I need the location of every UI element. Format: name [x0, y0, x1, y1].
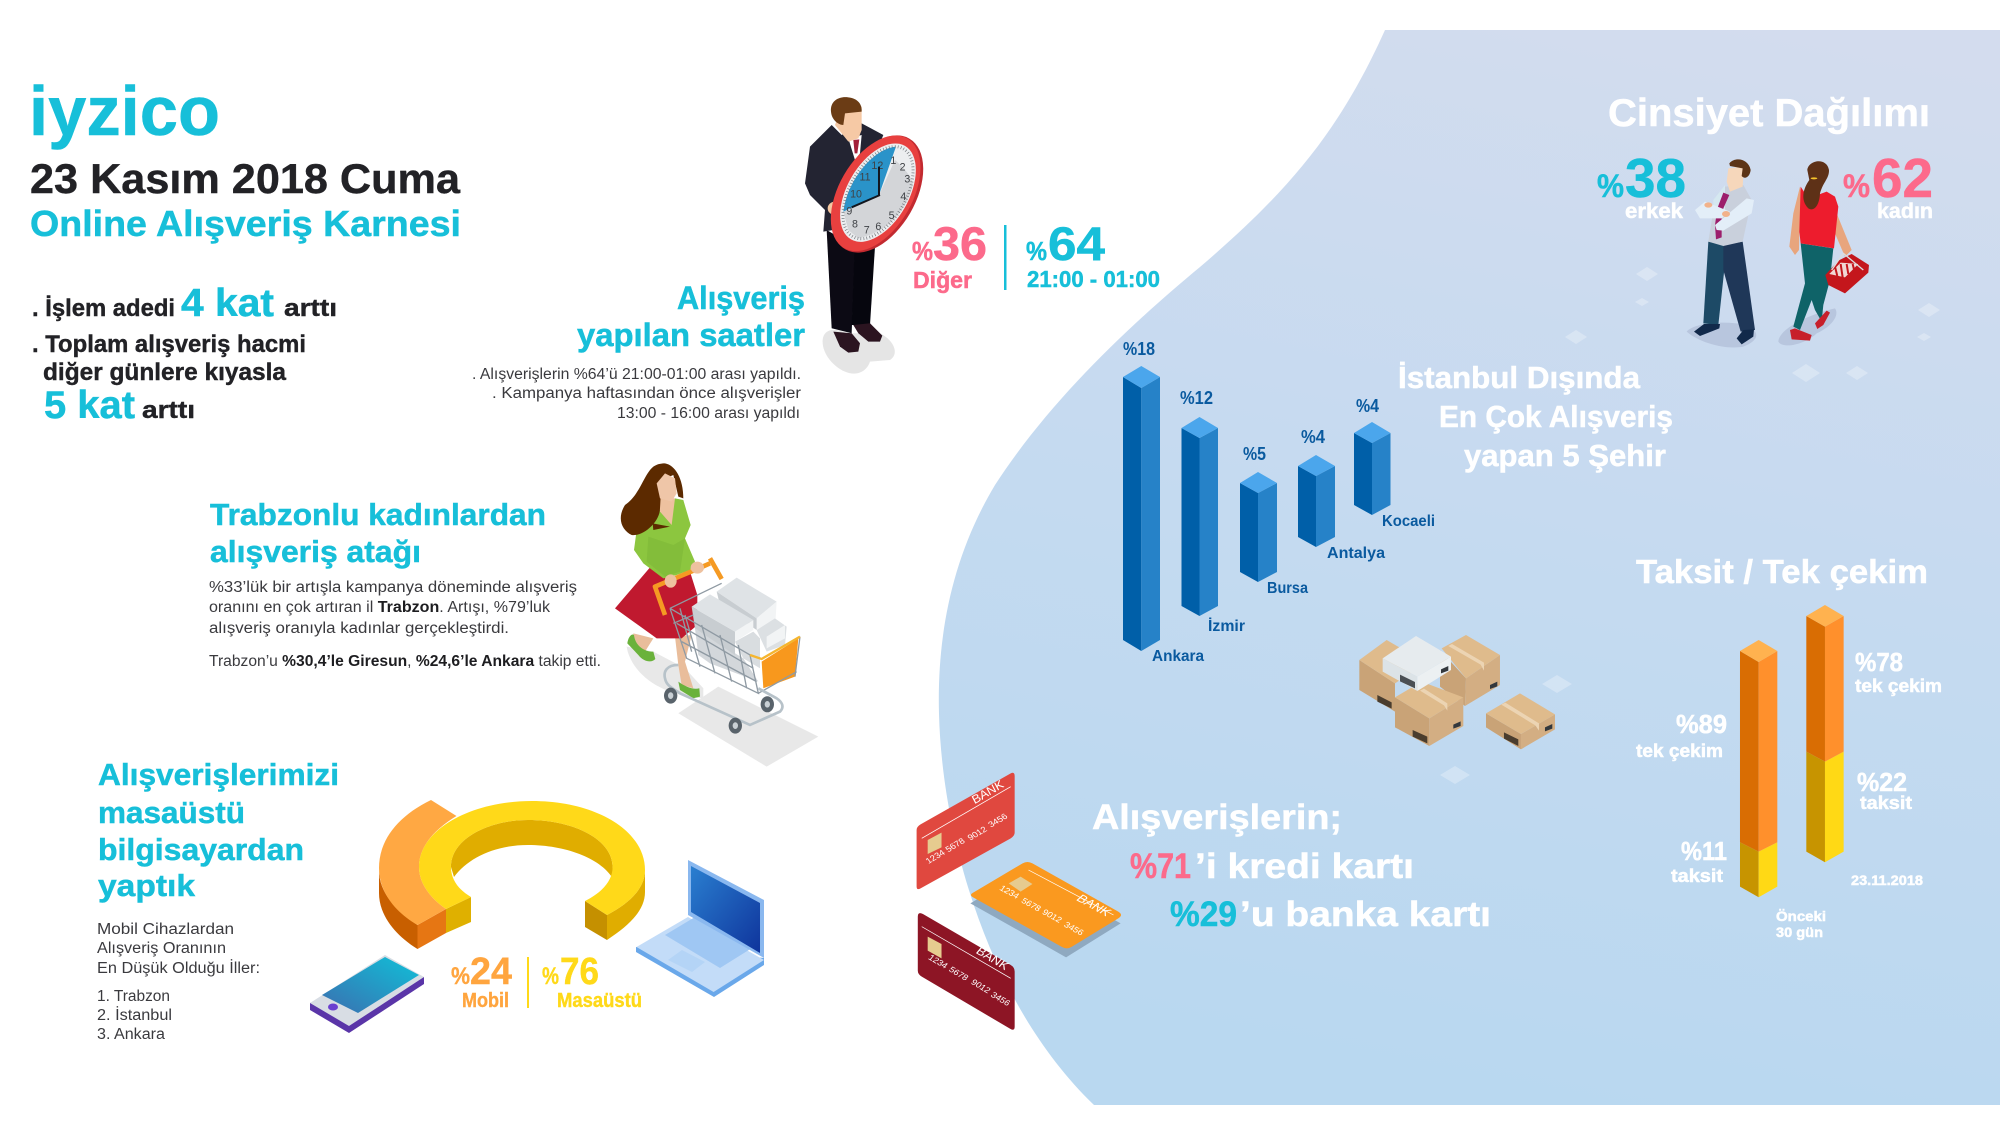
- decorative floor diamonds: [1440, 267, 1940, 784]
- heading: shopping hours: Alışveriş: [677, 280, 805, 316]
- clock: 12: [871, 160, 883, 172]
- heading: desktop shopping: Alışverişlerimizi: [98, 757, 339, 792]
- card: maroon: 5678: [947, 965, 971, 982]
- bar: İzmir: İzmir: [1208, 617, 1245, 635]
- stat: 24 percent mobile: %: [451, 963, 470, 990]
- stat labels: installment chart: 23.11.2018: [1851, 872, 1923, 888]
- stat: 38 percent men: %: [1597, 168, 1624, 204]
- subtitle: Online Alışveriş Karnesi: [30, 203, 461, 244]
- card: red: BANK: [968, 778, 1008, 806]
- text block: key highlights: arttı: [142, 397, 195, 424]
- divider: [1004, 225, 1006, 290]
- card: red: [917, 773, 1015, 889]
- card: maroon: 1234: [926, 953, 950, 970]
- bar: İzmir: %12: [1180, 388, 1213, 408]
- bar: Ankara: %18: [1123, 339, 1155, 359]
- stat labels: installment chart: %89: [1676, 709, 1727, 739]
- illustration: cardboard boxes: [1359, 635, 1555, 749]
- text block: key highlights: 4 kat: [181, 282, 274, 325]
- heading: desktop shopping: masaüstü: [98, 795, 245, 830]
- stat: 64 percent 21:00-01:00: %: [1026, 236, 1047, 266]
- illustration: woman with basket: [1778, 161, 1869, 345]
- stat labels: installment chart: tek çekim: [1855, 676, 1942, 696]
- clock: [812, 120, 942, 268]
- text block: key highlights: diğer günlere kıyasla: [43, 359, 287, 386]
- heading: shopping hours: [577, 280, 805, 353]
- stat: 24 percent mobile: 24: [470, 951, 512, 993]
- clock: 3: [904, 173, 910, 185]
- illustration: woman with shopping cart: [615, 463, 818, 767]
- chart: 3D donut mobile vs desktop: [379, 800, 645, 949]
- stat: 62 percent women: [1843, 147, 1933, 223]
- text block: card share: Alışverişlerin;: [1092, 798, 1342, 837]
- illustration: businessman holding clock: [805, 97, 942, 374]
- card: red: 3456: [986, 811, 1010, 829]
- text block: card share: [1092, 798, 1491, 934]
- bar: Ankara: [1123, 339, 1204, 665]
- text block: key highlights: arttı: [284, 295, 337, 322]
- text block: lowest mobile cities: 2. İstanbul: [97, 1006, 172, 1024]
- card: maroon: BANK: [973, 944, 1013, 973]
- stat: 76 percent desktop: Masaüstü: [557, 990, 642, 1012]
- clock: 11: [859, 172, 871, 184]
- heading: shopping hours: yapılan saatler: [577, 317, 805, 353]
- heading: Trabzon: Trabzonlu kadınlardan: [210, 497, 546, 532]
- clock: 9: [846, 206, 852, 218]
- stat labels: installment chart: 30 gün: [1776, 924, 1823, 940]
- icon: smartphone: [310, 955, 424, 1033]
- bar: 23.11.2018: [1806, 605, 1844, 862]
- card: orange: BANK: [1074, 892, 1114, 919]
- bar: Antalya: Antalya: [1327, 545, 1385, 562]
- clock: 4: [900, 191, 906, 203]
- stat: 62 percent women: kadın: [1877, 200, 1933, 223]
- stat: 64 percent 21:00-01:00: [1026, 217, 1160, 292]
- clock: 10: [850, 188, 862, 200]
- text block: lowest mobile cities: [97, 921, 260, 1043]
- bar: Bursa: %5: [1243, 444, 1266, 464]
- heading: desktop shopping: yaptık: [98, 868, 196, 903]
- card: maroon: [918, 913, 1015, 1030]
- card: maroon: 9012: [969, 977, 993, 995]
- bar: Antalya: %4: [1301, 427, 1325, 447]
- stat labels: installment chart: taksit: [1671, 866, 1723, 886]
- text block: key highlights: . Toplam alışveriş hacmi: [32, 331, 306, 358]
- bar chart: installment stacked bars: [1740, 605, 1844, 897]
- heading: desktop shopping: bilgisayardan: [98, 832, 304, 867]
- text block: card share: ’i kredi kartı: [1195, 847, 1414, 886]
- heading: Trabzon: alışveriş atağı: [210, 534, 421, 569]
- text block: card share: %71: [1130, 847, 1191, 886]
- heading: top 5 cities: En Çok Alışveriş: [1439, 399, 1673, 434]
- stat: 64 percent 21:00-01:00: 21:00 - 01:00: [1027, 266, 1160, 292]
- stat: 24 percent mobile: Mobil: [462, 990, 509, 1012]
- bar: Kocaeli: [1354, 396, 1435, 530]
- cart with boxes: [655, 558, 800, 734]
- card: orange: [970, 862, 1121, 957]
- stat: 36 percent other: %: [912, 236, 933, 266]
- stat labels: installment chart: tek çekim: [1636, 741, 1723, 761]
- illustration: bank cards: [917, 773, 1121, 1030]
- heading: Trabzon: [210, 497, 546, 569]
- clock: 8: [852, 218, 858, 230]
- text block: card share: ’u banka kartı: [1240, 895, 1491, 934]
- text block: card share: %29: [1170, 895, 1237, 934]
- clock: 7: [864, 224, 870, 236]
- stat: 76 percent desktop: %: [542, 963, 559, 990]
- heading: desktop shopping: [98, 757, 339, 903]
- stat: 64 percent 21:00-01:00: 64: [1048, 217, 1105, 270]
- bar chart: top 5 cities: [1123, 339, 1435, 665]
- text block: shopping hours notes: . Kampanya haftasından önce alışverişler: [492, 385, 801, 402]
- stat labels: installment chart: taksit: [1860, 793, 1912, 813]
- text block: Trabzon details: [209, 579, 601, 670]
- clock: 2: [900, 162, 906, 174]
- text block: Trabzon details: oranını en çok artıran il Trabzon. Artışı, %79’luk: [209, 599, 550, 616]
- stat: 62 percent women: %: [1843, 168, 1870, 204]
- text block: lowest mobile cities: Alışveriş Oranının: [97, 940, 226, 957]
- bar: previous 30 days: [1740, 640, 1777, 897]
- bar: Kocaeli: Kocaeli: [1382, 513, 1435, 530]
- text block: lowest mobile cities: Mobil Cihazlardan: [97, 921, 234, 938]
- stat labels: installment chart: Önceki: [1776, 908, 1826, 924]
- divider: [527, 957, 529, 1008]
- clock: 6: [875, 221, 881, 233]
- stat: 36 percent other: [912, 217, 987, 293]
- illustration: man: [1687, 159, 1756, 348]
- text block: shopping hours notes: [472, 366, 801, 422]
- bar: Antalya: [1298, 427, 1385, 562]
- card: red: 5678: [943, 836, 967, 854]
- bar: Bursa: [1240, 444, 1308, 597]
- heading: top 5 cities: [1398, 360, 1673, 473]
- icon: laptop: [636, 860, 764, 997]
- stat: 76 percent desktop: 76: [560, 951, 599, 993]
- text block: key highlights: [32, 282, 337, 427]
- stat: 38 percent men: [1597, 147, 1686, 223]
- card: orange: 9012: [1040, 907, 1064, 925]
- stat labels: installment chart: %78: [1855, 647, 1903, 677]
- text block: Trabzon details: %33’lük bir artışla kampanya döneminde alışveriş: [209, 579, 577, 596]
- clock: 1: [890, 155, 896, 167]
- text block: lowest mobile cities: 3. Ankara: [97, 1026, 165, 1043]
- stat: 76 percent desktop: [542, 951, 642, 1012]
- text block: Trabzon details: alışveriş oranıyla kadınlar gerçekleştirdi.: [209, 620, 509, 637]
- stat labels: installment chart: %11: [1681, 836, 1727, 866]
- heading: installment vs single payment: Taksit / Tek çekim: [1636, 553, 1928, 590]
- bar: İzmir: [1180, 388, 1245, 635]
- text block: Trabzon details: Trabzon’u %30,4’le Giresun, %24,6’le Ankara takip etti.: [209, 653, 601, 670]
- stat labels: installment chart: [1636, 647, 1942, 940]
- stat labels: installment chart: %22: [1857, 767, 1907, 797]
- text block: lowest mobile cities: En Düşük Olduğu İller:: [97, 959, 260, 977]
- card: orange: 5678: [1019, 896, 1043, 913]
- stat: 38 percent men: 38: [1625, 147, 1686, 209]
- card: red: 9012: [965, 824, 989, 842]
- stat: 62 percent women: 62: [1872, 147, 1933, 209]
- stat: 36 percent other: Diğer: [913, 267, 972, 293]
- heading: top 5 cities: yapan 5 Şehir: [1464, 438, 1666, 473]
- stat: 36 percent other: 36: [933, 217, 987, 270]
- clock: 5: [889, 210, 895, 222]
- text block: shopping hours notes: 13:00 - 16:00 arası yapıldı: [617, 405, 800, 422]
- bar: Bursa: Bursa: [1267, 580, 1308, 597]
- heading: top 5 cities: İstanbul Dışında: [1398, 360, 1641, 395]
- panel: blue curved background: [939, 30, 2000, 1105]
- text block: shopping hours notes: . Alışverişlerin %64’ü 21:00-01:00 arası yapıldı.: [472, 366, 801, 383]
- text block: key highlights: . İşlem adedi: [32, 295, 175, 322]
- stat: 38 percent men: erkek: [1625, 200, 1683, 223]
- card: red: 1234: [924, 848, 947, 865]
- logo: iyzico: iyzico: [29, 72, 220, 150]
- card: orange: 1234: [998, 883, 1021, 901]
- heading: gender distribution: Cinsiyet Dağılımı: [1608, 92, 1930, 135]
- card: orange: 3456: [1062, 920, 1086, 937]
- bar: Ankara: Ankara: [1152, 648, 1204, 665]
- title: date: 23 Kasım 2018 Cuma: [30, 155, 461, 202]
- text block: lowest mobile cities: 1. Trabzon: [97, 988, 170, 1005]
- stat: 24 percent mobile: [451, 951, 512, 1012]
- text block: key highlights: 5 kat: [44, 384, 135, 427]
- bar: Kocaeli: %4: [1356, 396, 1379, 416]
- card: maroon: 3456: [989, 990, 1012, 1008]
